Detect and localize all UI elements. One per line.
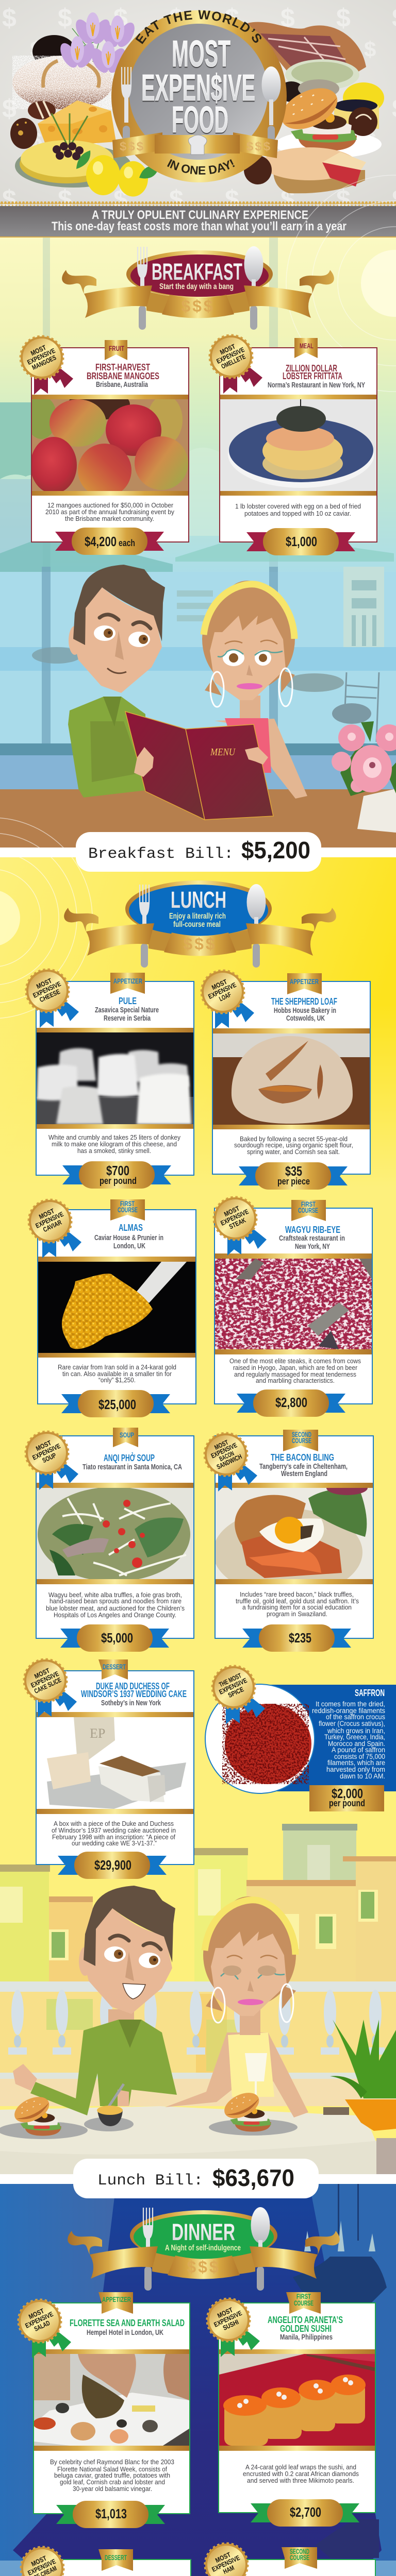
price badge: $1,013 xyxy=(95,2506,127,2521)
title text: GOLDEN SUSHI xyxy=(280,2324,332,2334)
tab: category: FIRST xyxy=(296,2292,311,2300)
price badge xyxy=(246,528,355,555)
saffron text: Morocco and Spain. xyxy=(328,1740,385,1748)
medal xyxy=(210,335,262,394)
description: spring water, and Cornish sea salt. xyxy=(247,1148,340,1156)
railing xyxy=(0,1981,396,2055)
hands xyxy=(134,747,268,777)
woman xyxy=(202,581,307,799)
plates and burgers xyxy=(0,2088,298,2139)
price badge xyxy=(242,1624,351,1652)
saffron text: dawn to 10 AM. xyxy=(340,1772,385,1780)
description: By celebrity chef Raymond Blanc for the 2003 xyxy=(50,2458,174,2466)
description: and served with three Mikimoto pearls. xyxy=(247,2477,354,2484)
card: golden sushi: Manila, Philippines xyxy=(280,2333,333,2342)
lunch bill: $63,670 xyxy=(212,2164,294,2191)
tab: category xyxy=(105,340,127,360)
chandelier xyxy=(293,2184,387,2558)
tab: category xyxy=(98,2292,133,2314)
description: our wedding cake WE 3-V1-37.” xyxy=(72,1839,157,1847)
medal: MOST xyxy=(27,2307,45,2320)
title text xyxy=(87,362,159,381)
title text: FLORETTE SEA AND EARTH SALAD xyxy=(70,2318,185,2328)
medal: EXPENSIVE xyxy=(26,347,57,366)
card: shepherd loaf xyxy=(202,971,370,1190)
card: wagyu rib-eye: New York, NY xyxy=(295,1243,330,1251)
title emblem xyxy=(111,10,287,182)
medal: CAVIAR xyxy=(42,1218,63,1233)
price badge: $29,900 xyxy=(94,1857,131,1873)
price box: per pound xyxy=(329,1798,365,1808)
card: wagyu rib-eye: Craftsteak restaurant in xyxy=(279,1234,345,1243)
saffron text: filaments, which are xyxy=(327,1759,385,1767)
breakfast bill: $5,200 xyxy=(241,837,310,863)
tab: category: MEAL xyxy=(300,342,314,350)
medal: MANGOES xyxy=(31,353,57,371)
price box: $2,000 xyxy=(332,1786,363,1801)
photo: mangoes xyxy=(32,399,188,491)
card: bacon bling: Tangberry’s cafe in Cheltenham, xyxy=(259,1463,348,1471)
medal: LOAF xyxy=(218,991,233,1003)
medal xyxy=(19,2300,71,2358)
title text: WINDSOR’S 1937 WEDDING CAKE xyxy=(81,1689,187,1699)
tab: category xyxy=(291,1200,326,1221)
description: Baked by following a secret 55-year-old xyxy=(240,1135,348,1143)
medal: EXPENSIVE xyxy=(218,1676,249,1696)
tab: category xyxy=(98,1659,128,1680)
tab: category: COURSE xyxy=(118,1206,138,1214)
price badge xyxy=(62,1161,171,1189)
card: mangoes: Brisbane, Australia xyxy=(96,381,148,389)
title text: ANQI PHỞ SOUP xyxy=(104,1452,155,1463)
description: Hospitals of Los Angeles and Orange County. xyxy=(54,1611,176,1619)
saffron text: of the saffron crocus xyxy=(326,1713,385,1721)
medal: SALAD xyxy=(33,2319,51,2333)
card: florette salad xyxy=(19,2292,190,2528)
tab: category xyxy=(294,338,318,358)
description: and regularly massaged for meat tenderness xyxy=(234,1370,356,1378)
lunch bill: Lunch Bill: xyxy=(97,2172,203,2190)
medal: MOST xyxy=(223,1205,241,1218)
tab: category: SOUP xyxy=(120,1431,134,1439)
tab: category xyxy=(113,1428,138,1447)
saffron text: which grows in Iran, xyxy=(327,1727,385,1735)
description: Rare caviar from Iran sold in a 24-karat gold xyxy=(58,1363,176,1371)
dinner section background xyxy=(0,2184,396,2576)
title text: PULE xyxy=(119,996,137,1006)
description xyxy=(243,2463,359,2484)
description: Includes “rare breed bacon,” black truffles, xyxy=(240,1590,354,1598)
photo: salad xyxy=(34,2354,189,2446)
title text: ANGELITO ARANETA’S xyxy=(268,2315,343,2325)
medal xyxy=(202,971,254,1029)
price badge: $1,000 xyxy=(286,534,317,549)
dinner heading: DINNER xyxy=(172,2219,235,2245)
dinner heading xyxy=(68,2207,340,2291)
price badge: per pound xyxy=(100,1176,137,1186)
medal: EXPENSIVE xyxy=(31,980,62,999)
medal: MOST xyxy=(213,1438,229,1451)
title arc text bottom: IN ONE DAY! xyxy=(167,159,235,175)
tab: category xyxy=(98,2549,133,2571)
table xyxy=(0,789,396,848)
main title: FOOD xyxy=(172,99,228,141)
card: frrrozen haute chocolate xyxy=(21,2547,191,2576)
lunch heading: LUNCH xyxy=(171,887,226,913)
price badge: $2,800 xyxy=(275,1395,307,1410)
tab: category: FRUIT xyxy=(109,344,124,352)
price badge xyxy=(61,1390,170,1417)
medal: SANDWICH xyxy=(216,1452,243,1471)
price badge xyxy=(237,1389,345,1417)
medal xyxy=(21,2547,74,2576)
saffron text: Turkey, Greece, India, xyxy=(324,1733,385,1741)
description: milk to make one kilogram of this cheese, and xyxy=(52,1140,177,1148)
title text xyxy=(283,363,342,381)
tab: category xyxy=(110,1199,145,1221)
medal: MOST xyxy=(33,1667,51,1680)
tab: category: FIRST xyxy=(120,1199,135,1208)
gold ribbon with chef hat: $$$ xyxy=(120,140,145,154)
medal: OMELLETE xyxy=(220,352,246,370)
saffron text: consists of 75,000 xyxy=(334,1753,385,1760)
medal: MOST xyxy=(216,2306,234,2319)
card: wedding cake xyxy=(24,1659,194,1879)
medal: SOUP xyxy=(41,1451,58,1464)
saffron text xyxy=(312,1688,385,1780)
description: 1 lb lobster covered with egg on a bed of fried xyxy=(235,502,361,510)
price badge xyxy=(56,2501,165,2528)
photo: steak xyxy=(215,1259,372,1349)
breakfast heading: BREAKFAST xyxy=(152,259,242,285)
description xyxy=(46,1591,185,1619)
title text: ALMAS xyxy=(119,1223,143,1233)
medal xyxy=(212,1666,265,1724)
man xyxy=(68,565,165,798)
medal: EXPENSIVE xyxy=(215,346,246,365)
card: lobster frittata: Norma’s Restaurant in New York, NY xyxy=(268,381,365,389)
subtitle band: A TRULY OPULENT CULINARY EXPERIENCE xyxy=(92,208,308,222)
photo: cake box xyxy=(47,1717,186,1809)
medal: THE MOST xyxy=(218,1671,242,1688)
saffron text: It comes from the dried, xyxy=(316,1700,385,1708)
price badge: per piece xyxy=(277,1176,310,1187)
tab: category: COURSE xyxy=(294,2299,314,2307)
title text: BRISBANE MANGOES xyxy=(87,371,159,381)
price badge xyxy=(60,1624,169,1652)
lunch heading: full-course meal xyxy=(173,920,221,929)
tab: category: COURSE xyxy=(298,1206,318,1214)
price badge xyxy=(55,528,164,555)
description: A box with a piece of the Duke and Duchess xyxy=(54,1820,174,1827)
woman xyxy=(165,1896,308,2117)
medal: CAKE SLICE xyxy=(33,1676,62,1695)
description: hand-raised bean sprouts and noodles from rare xyxy=(50,1597,182,1605)
description: A 24-carat gold leaf wraps the sushi, and xyxy=(245,2463,356,2471)
card: almas caviar xyxy=(29,1199,196,1417)
price box xyxy=(309,1785,384,1811)
tab: category: COURSE xyxy=(292,1436,311,1445)
breakfast heading: Start the day with a bang xyxy=(159,282,234,291)
description xyxy=(234,1135,353,1156)
medal: EXPENSIVE xyxy=(34,1210,65,1230)
medal: BACON xyxy=(218,1449,235,1463)
card: anqi pho soup xyxy=(26,1428,194,1652)
card: golden sushi xyxy=(207,2292,375,2527)
card: pule cheese xyxy=(26,970,194,1189)
breakfast bill: Breakfast Bill: xyxy=(88,845,234,863)
price badge: $5,000 xyxy=(101,1630,133,1646)
lunch heading: Enjoy a literally rich xyxy=(169,912,226,921)
description: encrusted with 0.2 carat African diamonds xyxy=(243,2470,359,2478)
photo: saffron xyxy=(205,1684,315,1793)
card: pule cheese: Reserve in Serbia xyxy=(104,1014,151,1023)
medal: EXPENSIVE xyxy=(210,2554,241,2573)
medal xyxy=(205,1433,257,1492)
tab: category: SECOND xyxy=(292,1430,311,1438)
medal xyxy=(207,2299,260,2357)
price badge xyxy=(58,1852,167,1879)
card: shepherd loaf: Cotswolds, UK xyxy=(286,1014,325,1023)
photo: sushi xyxy=(219,2354,375,2446)
main title xyxy=(141,33,255,141)
title arc text top: EAT THE WORLD’S xyxy=(135,10,261,44)
photo: pho xyxy=(37,1488,193,1579)
medal: EXPENSIVE xyxy=(29,1670,60,1689)
saffron text: reddish-orange filaments xyxy=(312,1707,385,1715)
photo: cake box: EP xyxy=(90,1726,105,1741)
breakfast bill xyxy=(0,832,396,872)
card: florette salad: Hempel Hotel in London, UK xyxy=(87,2329,163,2337)
photo: loaf xyxy=(213,1033,370,1125)
description: has a smoked, stinky smell. xyxy=(77,1147,151,1155)
title text: THE BACON BLING xyxy=(271,1452,334,1463)
description xyxy=(45,501,174,522)
medal xyxy=(205,2544,258,2576)
card: wagyu rib-eye xyxy=(214,1197,372,1417)
description: program in Swaziland. xyxy=(267,1610,327,1618)
price badge: $35 xyxy=(285,1163,302,1179)
tab: category: APPETIZER xyxy=(290,977,319,986)
man xyxy=(13,1886,177,2115)
price badge: $4,200 xyxy=(85,534,117,549)
tab: category xyxy=(110,973,145,994)
medal: EXPENSIVE xyxy=(219,1208,250,1227)
medal: EXPENSIVE xyxy=(207,981,238,1001)
medal: MOST xyxy=(214,2551,232,2564)
card: mangoes xyxy=(21,336,189,555)
description: Wagyu beef, white alba truffles, a foie gras broth, xyxy=(48,1591,182,1599)
table xyxy=(0,2106,389,2174)
medal: EXPENSIVE xyxy=(24,2310,55,2330)
medal xyxy=(26,1432,78,1490)
main title: MOST xyxy=(172,33,230,75)
description xyxy=(236,1590,359,1618)
medal: EXPENSIVE xyxy=(212,2309,243,2329)
medal: SUSHI xyxy=(222,2318,240,2332)
description: One of the most elite steaks, it comes from cows xyxy=(229,1357,361,1365)
description: the Brisbane market community. xyxy=(65,515,154,522)
price badge: $2,700 xyxy=(290,2504,321,2520)
description: February 1998 with an inscription: “A piece of xyxy=(52,1833,175,1841)
description: “only” $1,250. xyxy=(98,1376,136,1384)
title text: WAGYU RIB-EYE xyxy=(285,1225,340,1235)
description: Florette National Salad Week, consists of xyxy=(57,2465,167,2473)
price badge xyxy=(251,2499,359,2527)
potted plant xyxy=(323,2020,396,2174)
medal: MOST xyxy=(30,2554,48,2568)
medal: MOST xyxy=(219,343,237,356)
dinner heading: A Night of self-indulgence xyxy=(165,2244,241,2252)
description xyxy=(58,1363,176,1384)
price badge: each xyxy=(119,538,135,548)
description: sourdough recipe, using organic spelt flour, xyxy=(234,1141,353,1149)
medal: MOST xyxy=(38,1207,56,1221)
main title: EXPEN$IVE xyxy=(141,67,255,109)
price badge: $235 xyxy=(289,1630,311,1646)
description xyxy=(48,1133,180,1155)
icon: spoon xyxy=(262,66,280,150)
card: anqi pho soup: Tiato restaurant in Santa Monica, CA xyxy=(82,1463,182,1471)
medal: EXPENSIVE xyxy=(31,1442,62,1462)
lunch section background xyxy=(0,818,396,2174)
card: wedding cake: Sotheby’s in New York xyxy=(101,1699,161,1707)
medal: MOST xyxy=(35,977,53,990)
description: potatoes and topped with 10 oz caviar. xyxy=(244,510,351,517)
photo: frittata xyxy=(220,399,376,491)
description: 30-year old balsamic vinegar. xyxy=(73,2485,152,2493)
title text: ZILLION DOLLAR xyxy=(286,363,337,374)
breakfast section background xyxy=(0,175,396,789)
description: and marbling characteristics. xyxy=(256,1377,335,1384)
title text xyxy=(268,2315,343,2334)
medal xyxy=(24,1659,77,1718)
medal: MOST xyxy=(35,1439,53,1452)
card: albarragena jamon xyxy=(205,2544,375,2576)
food illustration left xyxy=(10,12,159,196)
curtains xyxy=(0,2184,116,2576)
card: bacon bling: Western England xyxy=(281,1470,327,1478)
title text: FIRST-HARVEST xyxy=(95,362,150,372)
tab: category xyxy=(283,1430,318,1451)
title text: LOBSTER FRITTATA xyxy=(283,371,342,381)
photo: cheese xyxy=(37,1032,193,1124)
card: almas caviar: Caviar House & Prunier in xyxy=(94,1234,163,1242)
tab: category: APPETIZER xyxy=(102,2295,131,2303)
lunch heading xyxy=(64,880,336,968)
saffron text: A pound of saffron xyxy=(332,1746,385,1754)
medal xyxy=(29,1200,81,1258)
card: shepherd loaf: Hobbs House Bakery in xyxy=(274,1007,336,1015)
medal xyxy=(214,1197,267,1256)
price badge: $700 xyxy=(106,1163,129,1178)
price badge xyxy=(239,1162,348,1190)
card: pule cheese: Zasavica Special Nature xyxy=(95,1006,159,1014)
photo: burger xyxy=(216,1488,373,1579)
lunch scene: terrace buildings xyxy=(0,1824,396,2106)
description xyxy=(229,1357,361,1384)
card: bacon bling xyxy=(205,1430,373,1652)
medal: CHEESE xyxy=(38,988,61,1004)
tab: category: COURSE xyxy=(290,2553,309,2562)
subtitle band xyxy=(0,201,396,238)
lunch scene: couple eating xyxy=(0,1886,396,2174)
tab: category: DESSERT xyxy=(103,1663,126,1671)
tab: category xyxy=(282,2547,317,2569)
title text: THE SHEPHERD LOAF xyxy=(271,996,337,1007)
tab: category xyxy=(287,973,322,994)
gold ribbon with chef hat: $$$ xyxy=(246,140,272,154)
tab: category: DESSERT xyxy=(105,2553,127,2562)
description: blue lobster meat, and auctioned for the Children’s xyxy=(46,1604,185,1612)
description: raised in Hyogo, Japan, which are fed on beer xyxy=(233,1364,358,1371)
description: of Windsor’s 1937 wedding cake auctioned in xyxy=(52,1826,176,1834)
description: White and crumbly and takes 25 liters of donkey xyxy=(48,1133,180,1141)
tab: category: APPETIZER xyxy=(113,977,142,985)
description xyxy=(235,502,361,517)
description: beluga caviar, grated truffle, potatoes with xyxy=(54,2471,170,2479)
menu xyxy=(125,711,273,820)
title text xyxy=(81,1681,187,1699)
tab: category xyxy=(286,2292,321,2314)
medal: STEAK xyxy=(228,1216,247,1230)
description: a fundraising item for a social education xyxy=(242,1603,352,1611)
card: almas caviar: London, UK xyxy=(113,1242,145,1250)
menu: MENU xyxy=(210,747,236,758)
tab: category: SECOND xyxy=(290,2547,309,2555)
gold ribbon with chef hat xyxy=(112,132,278,158)
description: tin can. Also available in a smaller tin for xyxy=(62,1370,172,1378)
saffron text: harvested only from xyxy=(326,1766,385,1773)
tab: category: FIRST xyxy=(301,1200,316,1208)
breakfast scene: couple with menu xyxy=(0,565,396,848)
panel: saffron xyxy=(205,1666,396,1811)
photo: caviar xyxy=(38,1262,195,1353)
description: truffle oil, gold leaf, gold dust and saffron. It’s xyxy=(236,1597,359,1605)
lunch bill xyxy=(0,2159,396,2198)
vase of roses xyxy=(332,721,396,833)
medal xyxy=(26,970,79,1028)
medal: MOST xyxy=(210,978,228,991)
description xyxy=(52,1820,176,1847)
description: 2010 as part of the annual fundraising event by xyxy=(45,508,174,516)
header panel xyxy=(0,0,396,206)
food illustration right xyxy=(244,22,384,193)
medal: SPICE xyxy=(227,1685,245,1699)
medal: EXPENSIVE xyxy=(210,1441,238,1460)
description: gold leaf, Cornish crab and lobster and xyxy=(60,2478,165,2486)
medal xyxy=(21,336,73,395)
saffron text: flower (Crocus sativus), xyxy=(319,1720,385,1727)
icon: fork xyxy=(121,67,131,150)
breakfast heading xyxy=(62,246,334,330)
medal: HAM xyxy=(222,2564,236,2575)
price badge: $25,000 xyxy=(98,1397,136,1412)
title text: DUKE AND DUCHESS OF xyxy=(96,1681,170,1691)
medal: MOST xyxy=(29,344,47,357)
description: 12 mangoes auctioned for $50,000 in October xyxy=(47,501,174,509)
card: lobster frittata xyxy=(210,335,377,555)
description xyxy=(50,2458,174,2493)
